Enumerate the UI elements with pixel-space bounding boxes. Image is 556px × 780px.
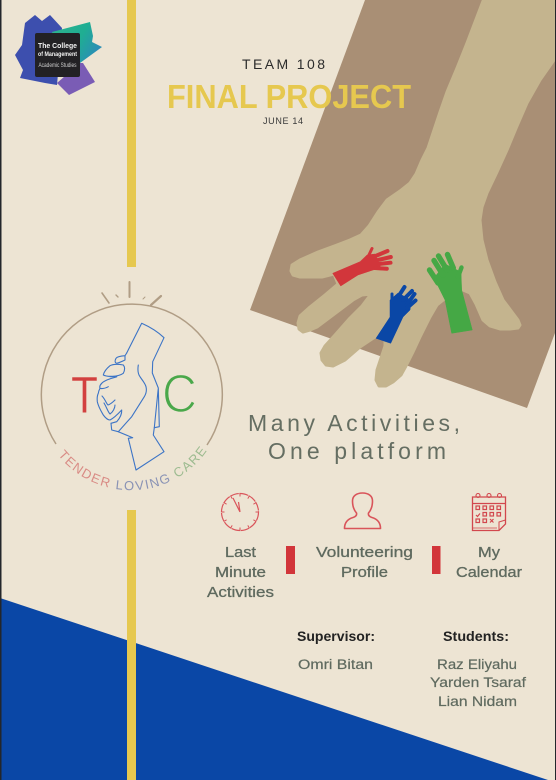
red small hand xyxy=(333,248,391,286)
student names: Raz Eliyahu xyxy=(437,657,517,672)
icon: clock xyxy=(222,494,258,530)
feature row xyxy=(207,493,522,601)
label: last minute activities: Last xyxy=(225,544,257,561)
label: my calendar: Calendar xyxy=(456,564,522,581)
tagline xyxy=(248,410,460,464)
icon: person xyxy=(344,493,380,528)
credits xyxy=(297,629,526,709)
title block xyxy=(167,56,411,126)
label: my calendar: My xyxy=(478,544,501,561)
label: last minute activities: Activities xyxy=(207,584,274,601)
yellow bar: bottom xyxy=(127,510,136,780)
curved caption xyxy=(58,452,206,490)
tagline line 1: Many Activities, xyxy=(248,410,460,436)
logo text: Academic Studies xyxy=(38,63,76,69)
yellow bar: top xyxy=(127,0,136,267)
label: my calendar xyxy=(456,544,522,581)
letter C: C xyxy=(162,364,197,424)
label: volunteering profile: Profile xyxy=(341,564,388,581)
logo text: The College xyxy=(38,41,77,50)
label: last minute activities: Minute xyxy=(215,564,266,581)
blue small hand xyxy=(376,287,416,343)
college logo xyxy=(15,15,102,95)
label: last minute activities xyxy=(207,544,274,601)
icon: calendar xyxy=(472,494,506,530)
logo teal shape xyxy=(52,22,102,63)
blue triangle xyxy=(0,598,548,780)
green small hand xyxy=(430,254,472,333)
supervisor heading: Supervisor: xyxy=(297,629,375,644)
student names: Lian Nidam xyxy=(438,694,517,709)
logo ring xyxy=(41,304,222,445)
logo text: of Management xyxy=(38,52,77,58)
divider: red bar 1 xyxy=(286,546,295,574)
students heading: Students: xyxy=(443,629,509,644)
label: volunteering profile: Volunteering xyxy=(316,544,413,561)
hand illustration xyxy=(250,0,555,408)
logo black box xyxy=(35,33,80,77)
letter T: T xyxy=(71,367,98,425)
brown backdrop xyxy=(250,0,555,408)
supervisor name: Omri Bitan xyxy=(298,657,373,672)
divider: red bar 2 xyxy=(432,546,440,574)
TLC logo xyxy=(40,281,224,490)
student names xyxy=(430,657,526,709)
final project heading: FINAL PROJECT xyxy=(167,79,411,116)
tagline line 2: One platform xyxy=(268,438,446,464)
holding hands line art xyxy=(97,323,164,470)
logo text xyxy=(38,41,77,69)
student names: Yarden Tsaraf xyxy=(430,675,526,690)
large hand xyxy=(291,1,554,386)
label: volunteering profile xyxy=(316,544,413,581)
team label: TEAM 108 xyxy=(242,56,325,72)
logo blue shape xyxy=(15,15,62,85)
logo rays xyxy=(102,282,161,305)
TLC logo: TENDER LOVING CARE xyxy=(60,446,206,490)
logo purple shape xyxy=(57,63,95,95)
date: JUNE 14 xyxy=(263,116,303,126)
